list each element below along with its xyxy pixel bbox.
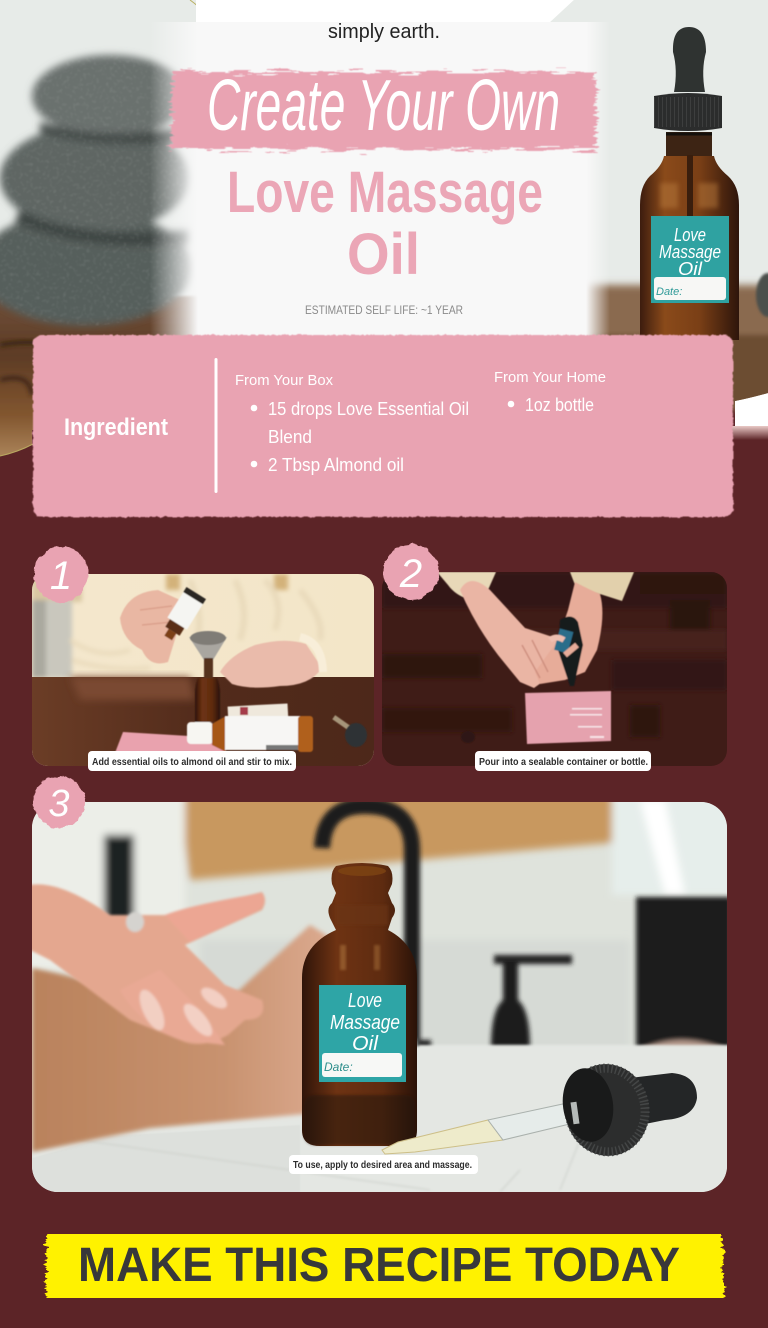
text: estimated shelf life: ESTIMATED SELF LIFE: ~1 YEAR	[305, 305, 463, 317]
photo: step 2 pouring into bottle	[382, 572, 727, 766]
caption: step 1: Add essential oils to almond oil and stir to mix.	[92, 757, 292, 768]
lying bottle	[187, 722, 213, 744]
caption: step 3: To use, apply to desired area and massage.	[293, 1160, 472, 1171]
pink card	[115, 731, 226, 751]
list: from your box: 15 drops Love Essential Oil	[268, 399, 469, 419]
box	[226, 702, 289, 717]
icon: dropper bottle with label: Oil	[678, 259, 703, 279]
icon: stacked stones	[0, 55, 193, 326]
badge: step number 2	[383, 544, 439, 600]
hand holding bottle	[120, 590, 180, 664]
hands	[460, 581, 566, 688]
dropper	[332, 715, 350, 730]
amber bottle under funnel	[195, 678, 220, 722]
icon: dropper bottle with label: Date:	[656, 286, 682, 298]
title: love massage oil: Oil	[347, 222, 420, 287]
funnel	[189, 637, 227, 660]
list: from your box	[235, 372, 469, 475]
badge: step number 2: 2	[399, 552, 422, 596]
button: make this recipe today: MAKE THIS RECIPE TODAY	[78, 1239, 680, 1292]
icon: dropper bottle with label: Love	[674, 225, 706, 245]
right hand	[220, 641, 322, 688]
badge: step number 3: 3	[48, 783, 70, 825]
icon: dropper bottle with label	[640, 27, 739, 340]
list: from your home: From Your Home	[494, 369, 606, 386]
logo: simply earth: simply earth.	[328, 21, 440, 43]
header photo: spa stones and wood table	[0, 0, 768, 466]
marble counter	[32, 1045, 740, 1200]
caption: step 2	[475, 751, 651, 771]
gold curve	[190, 0, 216, 30]
faucet	[322, 806, 731, 1075]
badge: step number 3	[33, 776, 85, 828]
icon: dropper bottle with label: Massage	[659, 242, 721, 262]
amber bottle with teal label: Love	[348, 990, 382, 1012]
card	[525, 691, 611, 744]
amber bottle with teal label: Oil	[352, 1033, 379, 1055]
heading: create your own on pink brush stroke	[172, 66, 596, 149]
list: from your box: 2 Tbsp Almond oil	[268, 455, 404, 475]
photo: step 1 adding oils	[32, 574, 374, 766]
caption: step 2: Pour into a sealable container or bottle.	[479, 757, 648, 768]
amber bottle with teal label: Date:	[324, 1060, 353, 1074]
list: from your home	[494, 369, 606, 415]
heading: ingredient: Ingredient	[64, 414, 168, 441]
dark bottle	[558, 616, 583, 686]
list: from your box: From Your Box	[235, 372, 333, 389]
badge: step number 1	[34, 546, 88, 602]
panel: ingredients	[33, 335, 733, 517]
list: from your box: Blend	[268, 427, 312, 447]
arm and hand	[32, 925, 350, 1152]
list: from your home: 1oz bottle	[525, 395, 594, 415]
amber bottle with teal label	[302, 863, 417, 1146]
title: love massage oil	[227, 160, 543, 287]
sleeves	[437, 572, 496, 600]
dropper with oil	[381, 1064, 697, 1156]
caption: step 3	[289, 1155, 478, 1174]
photo: step 3 applying oil with bottle	[20, 790, 740, 1200]
heading: create your own on pink brush stroke: Create Your Own	[207, 66, 560, 146]
bottle in hand	[164, 586, 206, 641]
panel: white title area	[150, 0, 610, 342]
title: love massage oil: Love Massage	[227, 160, 543, 225]
amber bottle with teal label: Massage	[330, 1012, 400, 1034]
caption: step 1	[88, 751, 296, 771]
badge: step number 1: 1	[50, 554, 72, 598]
